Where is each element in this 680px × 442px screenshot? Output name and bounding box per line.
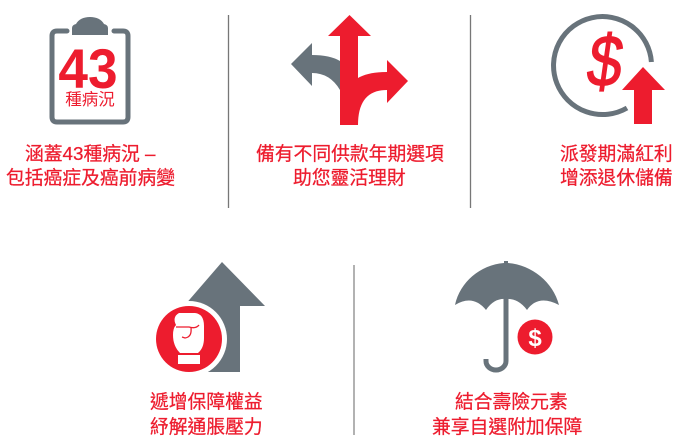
panel: increasing protection (150, 262, 265, 437)
caption: payment term options: 助您靈活理財 (293, 167, 406, 188)
icon: clipboard with 43 conditions: 種病況 (65, 90, 115, 109)
icon: dollar circle with up arrow: $ (583, 22, 628, 102)
caption: covers 43 conditions: 包括癌症及癌前病變 (6, 167, 175, 188)
icon: dollar circle with up arrow (554, 17, 665, 124)
icon: umbrella with dollar coin (455, 261, 559, 370)
caption: dividends at maturity (560, 143, 673, 188)
panel: life insurance (432, 261, 582, 437)
caption: covers 43 conditions (6, 143, 175, 188)
caption: life insurance elements (432, 391, 582, 437)
panel: flexible payment terms (256, 15, 444, 188)
icon: umbrella with dollar coin: $ (528, 325, 542, 352)
caption: protection rights: 遞增保障權益 (150, 391, 263, 412)
caption: payment term options: 備有不同供款年期選項 (256, 143, 444, 164)
caption: dividends at maturity: 派發期滿紅利 (560, 143, 673, 164)
icon: clipboard with 43 conditions: 43 (58, 38, 118, 100)
caption: life insurance elements: 結合壽險元素 (455, 391, 568, 412)
panel: 43 conditions (6, 17, 175, 188)
caption: protection rights: 紓解通脹壓力 (150, 416, 263, 437)
icon: branching arrows (291, 15, 408, 125)
caption: dividends at maturity: 增添退休儲備 (560, 167, 673, 188)
caption: life insurance elements: 兼享自選附加保障 (432, 416, 582, 437)
panel: dividends (554, 17, 673, 188)
caption: protection rights (150, 391, 263, 437)
caption: payment term options (256, 143, 444, 188)
caption: covers 43 conditions: 涵蓋43種病況 – (25, 143, 156, 164)
icon: up arrow with boxing glove (151, 262, 265, 377)
icon: clipboard with 43 conditions (52, 17, 128, 122)
